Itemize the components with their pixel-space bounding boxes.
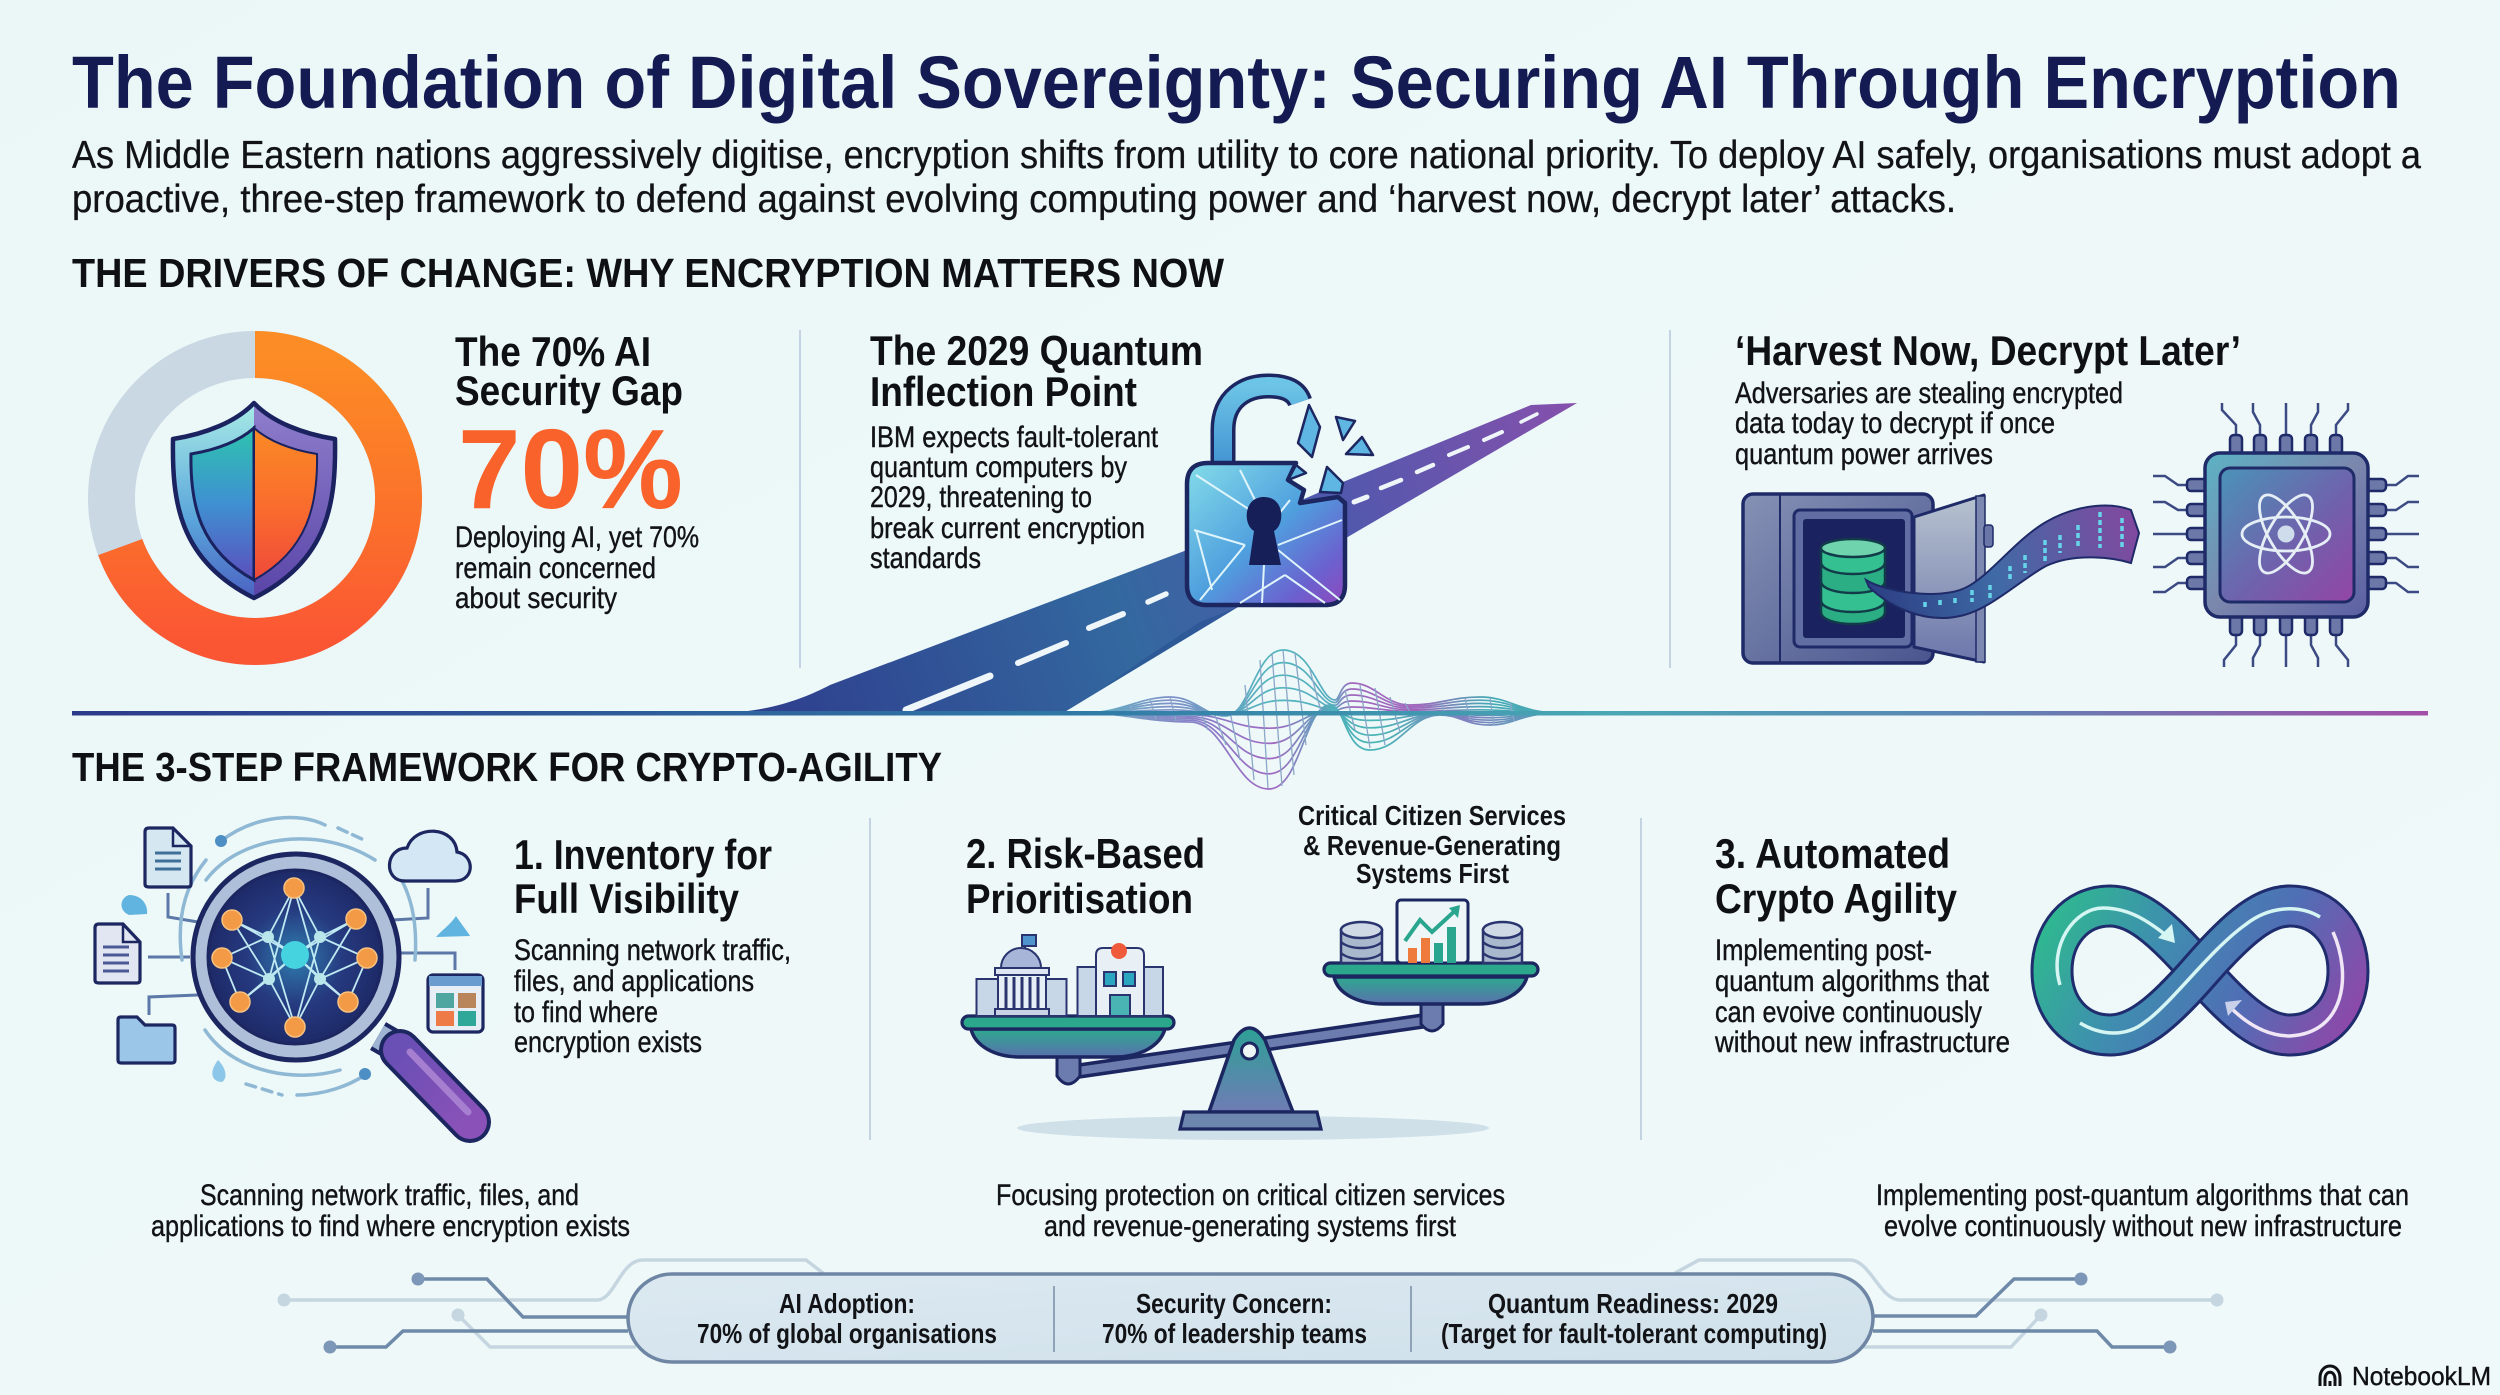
- step text: to find where: [514, 996, 658, 1029]
- stat bar: [628, 1274, 1873, 1362]
- caption: applications to find where encryption exists: [151, 1210, 630, 1243]
- icon: magnifier scanning network: [95, 817, 483, 1122]
- intro paragraph: [72, 134, 2421, 221]
- card heading: Inflection Point: [870, 368, 1137, 415]
- stat: security concern: Security Concern:: [1136, 1288, 1332, 1319]
- stat: quantum readiness: Quantum Readiness: 2029: [1488, 1288, 1778, 1319]
- card text: IBM expects fault-tolerant: [870, 421, 1159, 454]
- intro paragraph: proactive, three-step framework to defend against evolving computing power and ‘harvest now, decrypt later’ attacks.: [72, 178, 1956, 221]
- step text: Scanning network traffic,: [514, 934, 791, 967]
- priority label: Critical Citizen Services: [1298, 800, 1566, 831]
- panel: 2029 quantum inflection point: [870, 327, 1373, 605]
- step heading: 3. Automated: [1715, 830, 1950, 877]
- divider wave: mesh: [1085, 650, 1560, 789]
- caption: [151, 1179, 630, 1243]
- caption: [996, 1179, 1505, 1243]
- stat: security concern: 70% of leadership teams: [1102, 1318, 1367, 1349]
- icon: open vault with database: [1743, 494, 1993, 663]
- card text: quantum computers by: [870, 451, 1127, 484]
- icon: infinity loop: [2052, 906, 2348, 1036]
- card text: about security: [455, 582, 617, 615]
- step text: files, and applications: [514, 965, 754, 998]
- icon: government building: [976, 935, 1066, 1016]
- step text: encryption exists: [514, 1026, 702, 1059]
- card text: [870, 421, 1159, 575]
- card text: data today to decrypt if once: [1735, 407, 2055, 440]
- caption: and revenue-generating systems first: [1044, 1210, 1457, 1243]
- card text: remain concerned: [455, 552, 656, 585]
- stat: AI adoption: 70% of global organisations: [697, 1318, 997, 1349]
- data ribbon: [1866, 506, 2139, 618]
- caption: Scanning network traffic, files, and: [200, 1179, 579, 1212]
- panel: 70% AI security gap: [112, 328, 699, 642]
- horizontal rule: [72, 711, 2428, 716]
- card text: standards: [870, 542, 981, 575]
- caption: Implementing post-quantum algorithms that can: [1876, 1179, 2409, 1212]
- road to 2029: [720, 403, 1577, 713]
- card heading: Security Gap: [455, 367, 683, 414]
- caption: evolve continuously without new infrastructure: [1884, 1210, 2402, 1243]
- stat: AI adoption: [697, 1288, 997, 1349]
- step heading: 1. Inventory for: [514, 831, 772, 878]
- priority label: Systems First: [1356, 858, 1509, 889]
- caption: [1876, 1179, 2409, 1243]
- NotebookLM logo: NotebookLM: [2352, 1361, 2491, 1391]
- card text: 2029, threatening to: [870, 481, 1092, 514]
- card heading: [870, 327, 1203, 415]
- step text: [514, 934, 791, 1059]
- icon: database stacks: [1341, 922, 1522, 963]
- step heading: Crypto Agility: [1715, 875, 1958, 922]
- stat: quantum readiness: [1441, 1288, 1827, 1349]
- icon: broken padlock: [1187, 386, 1373, 605]
- stat: quantum readiness: (Target for fault-tolerant computing): [1441, 1318, 1827, 1349]
- priority label: & Revenue-Generating: [1303, 830, 1561, 861]
- panel: step 2 prioritisation: [962, 800, 1566, 1243]
- panel: harvest now, decrypt later: [1735, 327, 2419, 667]
- step heading: [966, 830, 1205, 922]
- step heading: Full Visibility: [514, 875, 740, 922]
- card heading: ‘Harvest Now, Decrypt Later’: [1735, 327, 2241, 374]
- card text: [455, 521, 699, 615]
- caption: Focusing protection on critical citizen services: [996, 1179, 1505, 1212]
- icon: balance scale: [962, 900, 1538, 1140]
- card text: Adversaries are stealing encrypted: [1735, 377, 2123, 410]
- icon: quantum chip: [2153, 403, 2419, 667]
- heading: 3-step framework: THE 3-STEP FRAMEWORK FOR CRYPTO-AGILITY: [72, 744, 942, 790]
- step text: can evoive continuously: [1715, 996, 1982, 1029]
- card text: [1735, 377, 2123, 471]
- card heading: The 2029 Quantum: [870, 327, 1203, 374]
- footer circuit lines: [278, 1260, 2224, 1354]
- step heading: Prioritisation: [966, 875, 1193, 922]
- icon: revenue chart: [1397, 900, 1468, 963]
- card text: break current encryption: [870, 512, 1145, 545]
- step text: [1714, 934, 2010, 1059]
- step text: without new infrastructure: [1714, 1026, 2010, 1059]
- stat: AI adoption: AI Adoption:: [779, 1288, 915, 1319]
- step heading: [514, 831, 772, 922]
- icon: shield: [173, 403, 335, 598]
- stat: security concern: [1102, 1288, 1367, 1349]
- step text: Implementing post-: [1715, 934, 1932, 967]
- icon: hospital: [1078, 943, 1163, 1016]
- priority label: [1298, 800, 1566, 889]
- panel: step 3 crypto agility: [1714, 830, 2409, 1243]
- card heading: The 70% AI: [455, 328, 651, 375]
- donut chart: 70%: [112, 354, 399, 642]
- card text: Deploying AI, yet 70%: [455, 521, 699, 554]
- step text: quantum algorithms that: [1715, 965, 1990, 998]
- card heading: [455, 328, 683, 414]
- heading: drivers of change: THE DRIVERS OF CHANGE: WHY ENCRYPTION MATTERS NOW: [72, 250, 1224, 296]
- card text: quantum power arrives: [1735, 438, 1993, 471]
- step heading: [1715, 830, 1958, 922]
- step heading: 2. Risk-Based: [966, 830, 1205, 877]
- panel: step 1 inventory: [95, 817, 791, 1243]
- big stat: 70%: 70%: [458, 406, 683, 532]
